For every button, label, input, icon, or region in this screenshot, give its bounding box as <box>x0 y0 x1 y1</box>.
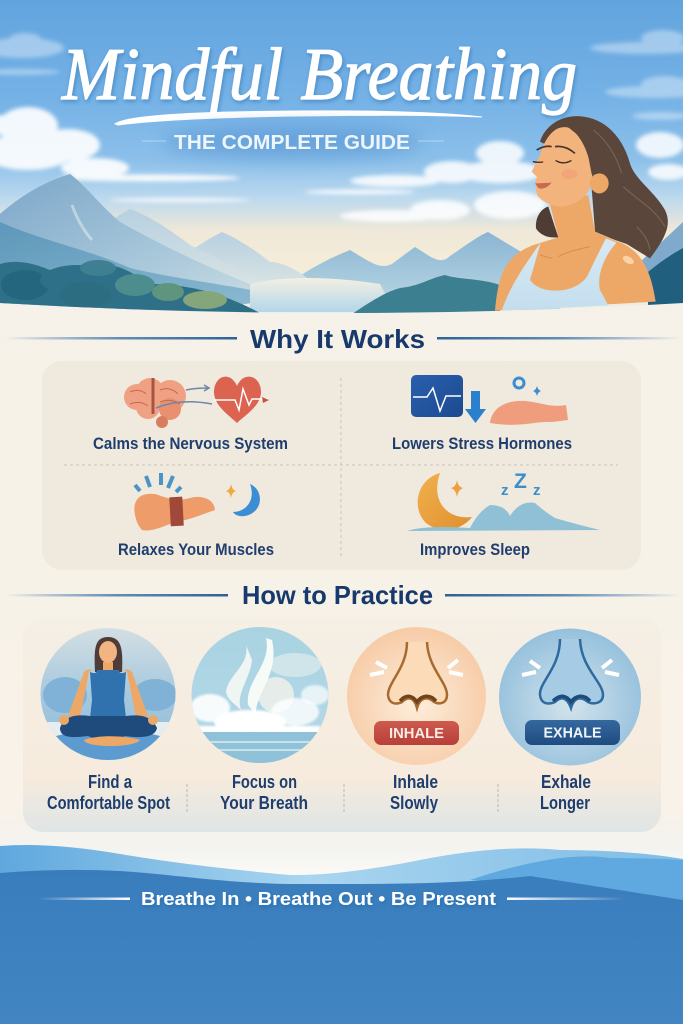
step label: inhale slowly: Slowly <box>390 793 438 813</box>
label: lowers: Lowers Stress Hormones <box>392 434 572 453</box>
hero landscape scene <box>0 0 683 320</box>
label: improves sleep: Improves Sleep <box>420 540 530 559</box>
label: calms: Calms the Nervous System <box>93 434 288 453</box>
panel: how to practice <box>23 617 661 832</box>
label: relaxes: Relaxes Your Muscles <box>118 540 274 559</box>
mountains <box>302 232 560 310</box>
zzz text: z <box>501 482 508 499</box>
step label: focus on your breath <box>220 772 308 813</box>
step label: focus on your breath: Focus on <box>232 772 297 792</box>
clouds <box>0 30 683 222</box>
step label: exhale longer: Exhale <box>541 772 591 792</box>
icon: person meditating <box>40 628 177 762</box>
step label: inhale slowly: Inhale <box>393 772 438 792</box>
woman <box>495 116 668 311</box>
heading: why it works: Why It Works <box>250 324 425 354</box>
forest right <box>352 275 500 314</box>
icon: breath swirl and clouds <box>190 626 330 766</box>
step label: find a comfortable spot: Find a <box>88 772 133 792</box>
title underline stroke <box>115 111 482 125</box>
icon: inhale nose <box>347 627 486 765</box>
icon: brain and heart <box>124 377 269 428</box>
zzz text: Z <box>514 470 527 493</box>
icon: monitor, arrow, muscle <box>411 375 568 425</box>
step label: find a comfortable spot <box>47 772 170 813</box>
forest left <box>0 260 262 314</box>
exhale label: EXHALE <box>544 726 602 742</box>
step label: exhale longer: Longer <box>540 793 590 813</box>
icon: relaxed arm and moon <box>134 473 260 531</box>
step label: focus on your breath: Your Breath <box>220 793 308 813</box>
panel: why it works <box>42 361 641 570</box>
subtitle: THE COMPLETE GUIDE <box>174 131 410 154</box>
subtitle <box>142 126 444 158</box>
icon: moon, stars, zzz, clouds <box>407 470 600 531</box>
heading: how to practice: How to Practice <box>242 580 433 610</box>
title <box>61 34 577 125</box>
lake <box>250 278 395 312</box>
footer tagline: Breathe In • Breathe Out • Be Present <box>141 889 496 909</box>
step label: find a comfortable spot: Comfortable Spot <box>47 793 170 813</box>
inhale label: INHALE <box>389 726 444 742</box>
footer waves <box>0 845 683 1024</box>
title text: Mindful Breathing <box>61 34 577 116</box>
step label: exhale longer <box>540 772 591 813</box>
step label: inhale slowly <box>390 772 438 813</box>
zzz text: z <box>533 482 540 499</box>
icon: exhale nose <box>499 628 641 766</box>
zzz text <box>501 470 540 499</box>
